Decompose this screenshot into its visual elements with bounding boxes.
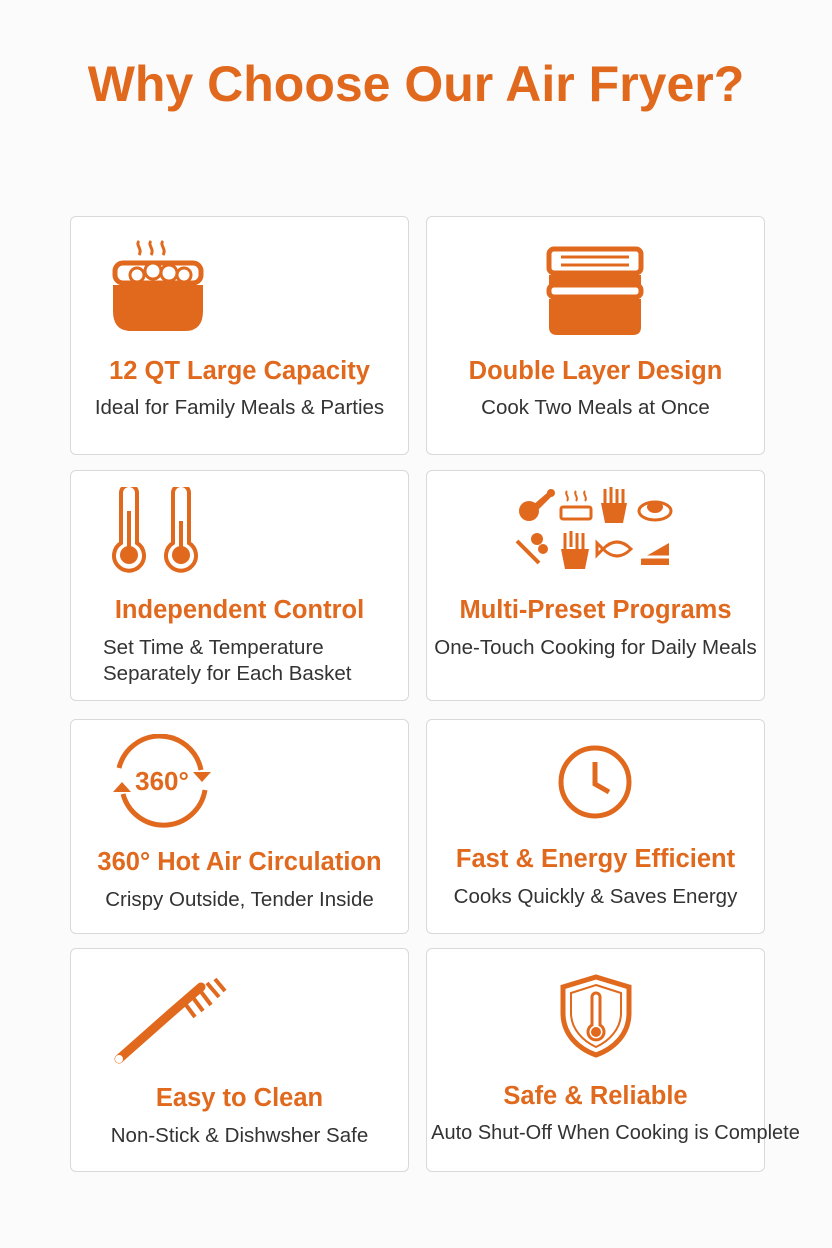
heading: 360° Hot Air Circulation xyxy=(97,848,382,876)
heading: Double Layer Design xyxy=(469,357,722,385)
heading: Safe & Reliable xyxy=(503,1082,688,1110)
panel: double layer xyxy=(426,216,765,455)
text: Auto Shut-Off When Cooking is Complete xyxy=(431,1122,800,1144)
heading: Independent Control xyxy=(115,596,364,624)
text: Ideal for Family Meals & Parties xyxy=(95,396,384,419)
icon: stacked baskets xyxy=(546,246,644,335)
text: One-Touch Cooking for Daily Meals xyxy=(434,636,757,659)
panel: safe xyxy=(426,948,765,1172)
text: Separately for Each Basket xyxy=(103,662,351,685)
icon: thermometers xyxy=(112,487,198,573)
heading: Easy to Clean xyxy=(156,1084,323,1112)
heading: Fast & Energy Efficient xyxy=(456,845,735,873)
text: Set Time & Temperature xyxy=(103,636,324,659)
text xyxy=(103,636,352,685)
text: Non-Stick & Dishwsher Safe xyxy=(111,1124,368,1147)
title: Why Choose Our Air Fryer? xyxy=(88,56,744,112)
text: Cooks Quickly & Saves Energy xyxy=(454,885,737,908)
heading: Multi-Preset Programs xyxy=(459,596,732,624)
panel: fast xyxy=(426,719,765,934)
icon: 360 arrows xyxy=(113,734,211,828)
icon: brush xyxy=(114,978,226,1064)
panel: capacity xyxy=(70,216,409,455)
heading: 12 QT Large Capacity xyxy=(109,357,370,385)
icon: food grid xyxy=(516,487,672,569)
icon: shield xyxy=(560,974,632,1058)
panel: presets xyxy=(426,470,765,701)
text: Cook Two Meals at Once xyxy=(481,396,710,419)
panel: clean xyxy=(70,948,409,1172)
icon: 360 arrows: 360° xyxy=(135,766,189,796)
panel: 360 air xyxy=(70,719,409,934)
icon: clock xyxy=(558,746,632,818)
icon: basket xyxy=(112,240,204,331)
text: Crispy Outside, Tender Inside xyxy=(105,888,374,911)
panel: independent control xyxy=(70,470,409,701)
